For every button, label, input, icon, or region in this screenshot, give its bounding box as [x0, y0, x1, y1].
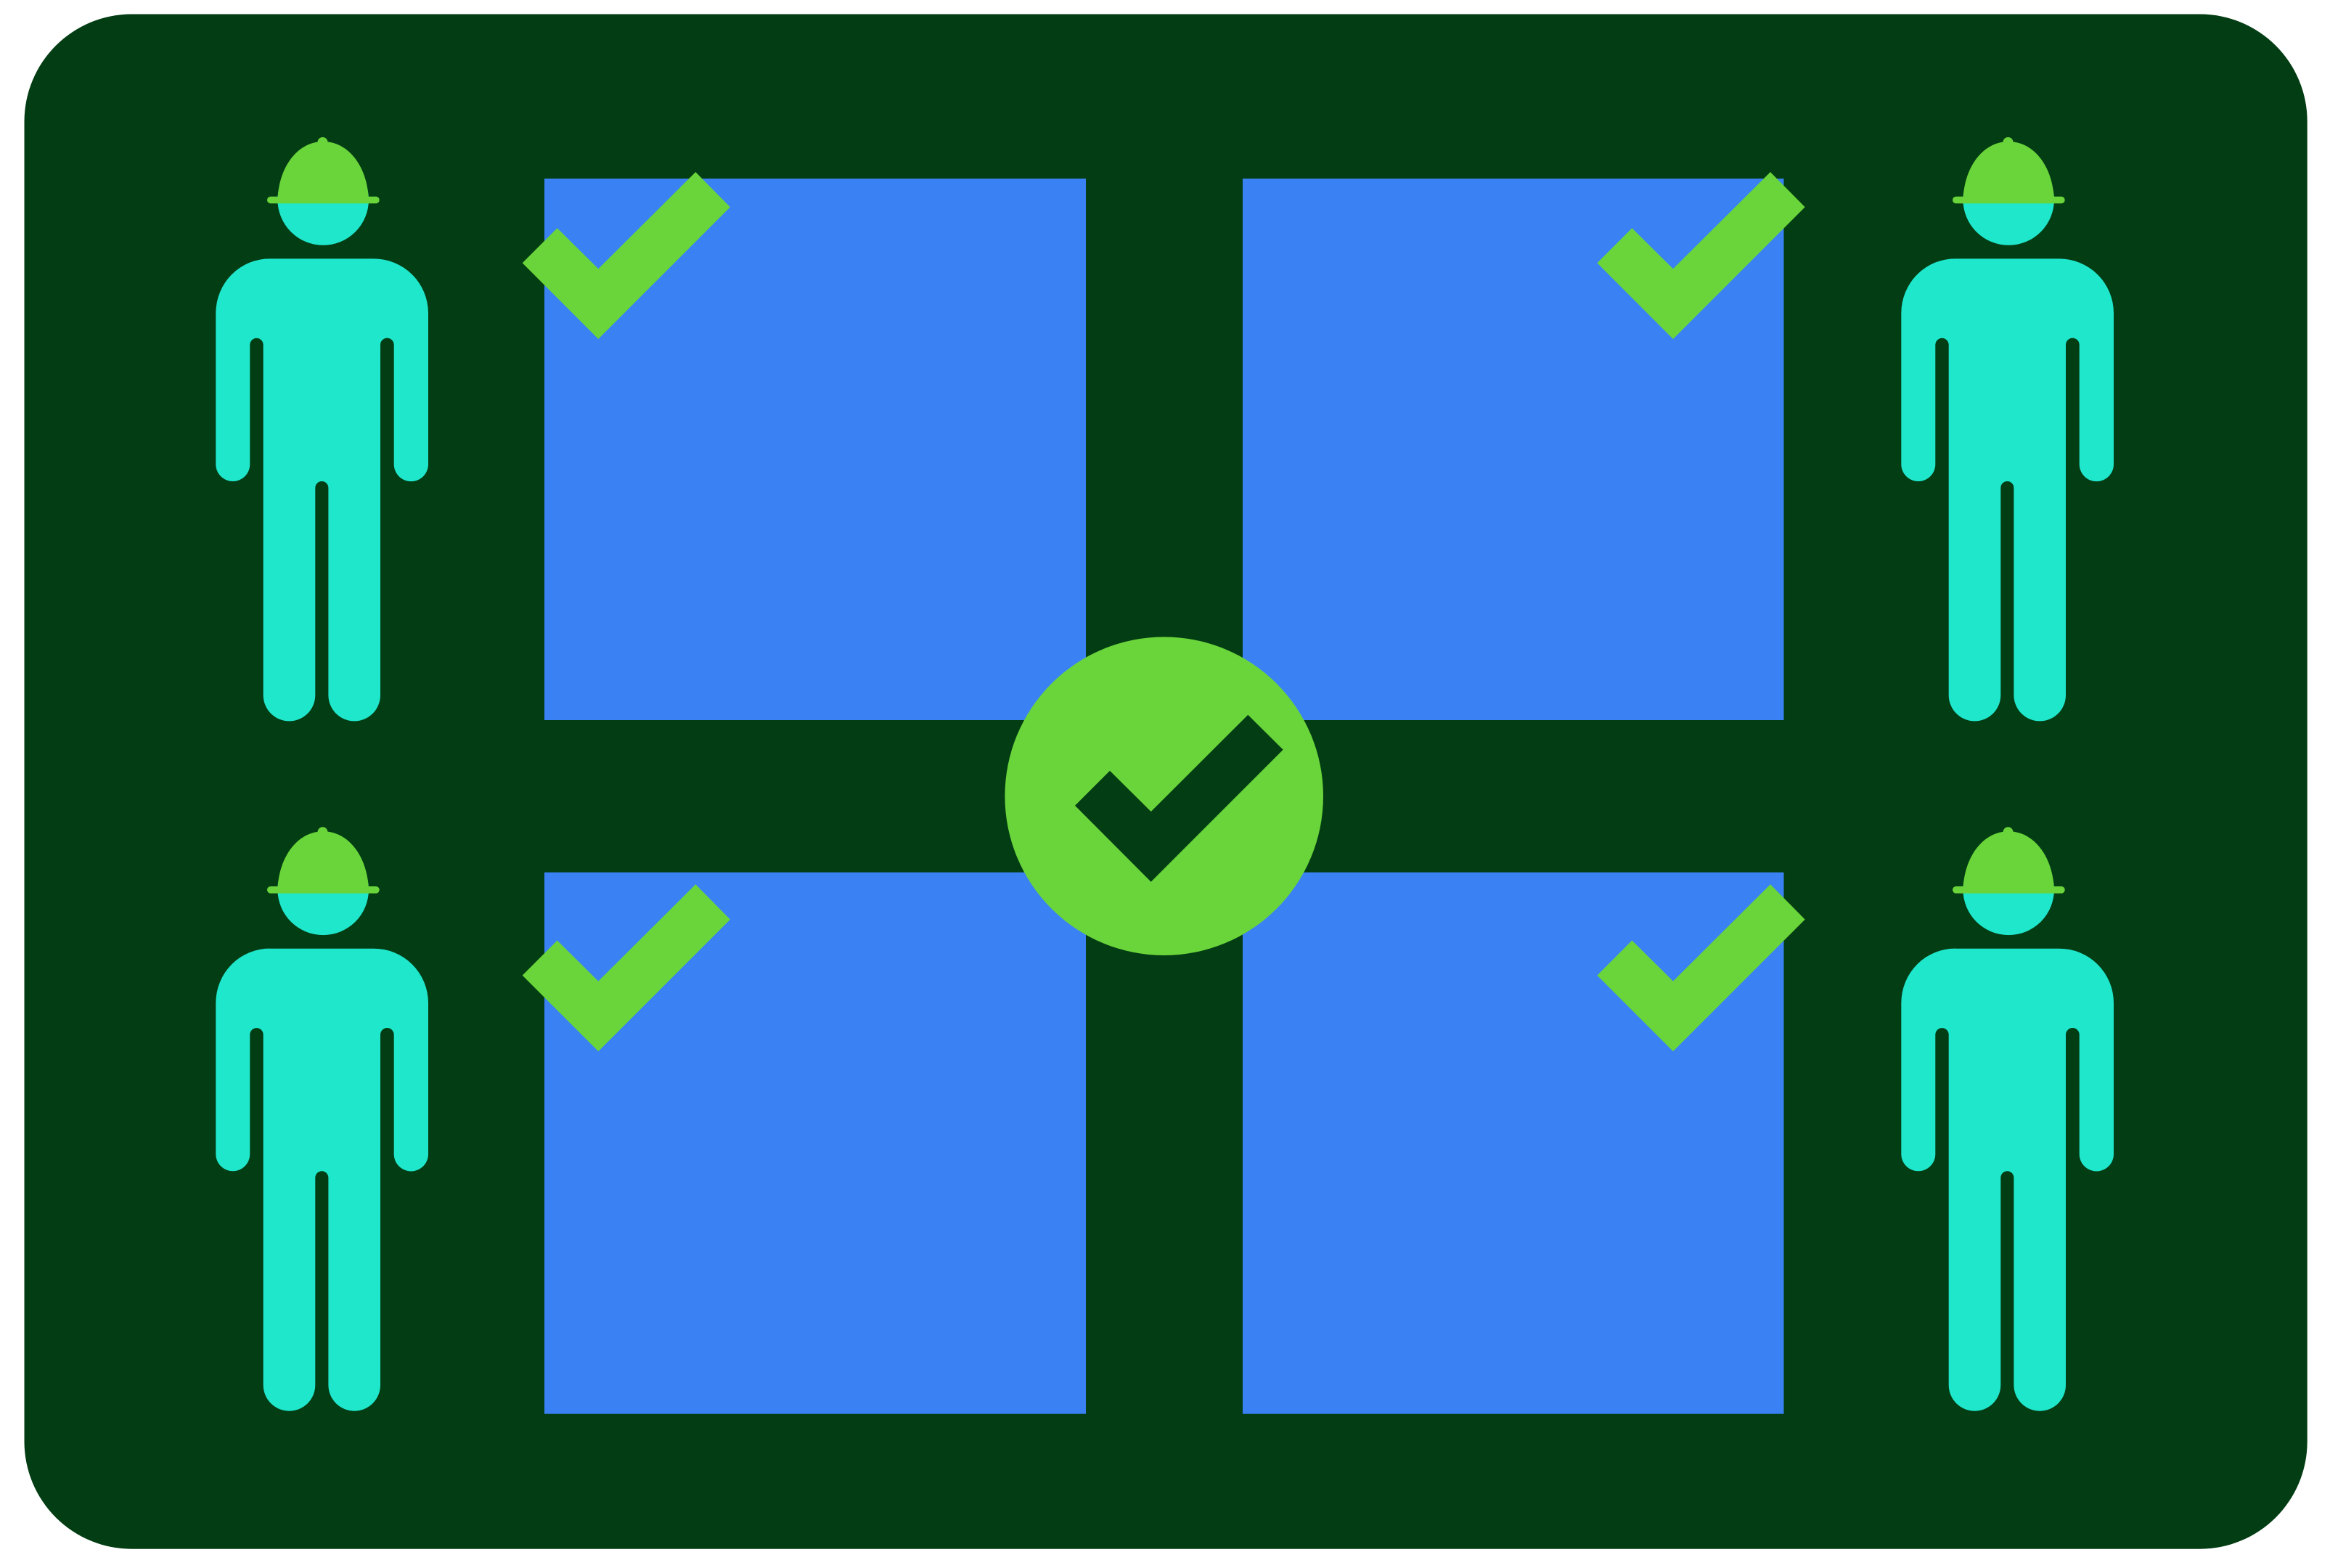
icon: check mark top-left	[523, 172, 730, 339]
icon: check mark bottom-left	[523, 884, 730, 1051]
panel: top-left blue square	[544, 179, 1086, 720]
panel: top-right blue square	[1243, 179, 1784, 720]
icon: worker top-left	[216, 137, 428, 721]
panel: bottom-left blue square	[544, 873, 1086, 1414]
panel: bottom-right blue square	[1243, 873, 1784, 1414]
icon: check mark bottom-right	[1597, 884, 1805, 1051]
icon: worker bottom-right	[1901, 827, 2114, 1411]
icon: check mark top-right	[1597, 172, 1805, 339]
icon: central approval badge	[1005, 637, 1323, 955]
icon: worker bottom-left	[216, 827, 428, 1411]
icon: worker top-right	[1901, 137, 2114, 721]
